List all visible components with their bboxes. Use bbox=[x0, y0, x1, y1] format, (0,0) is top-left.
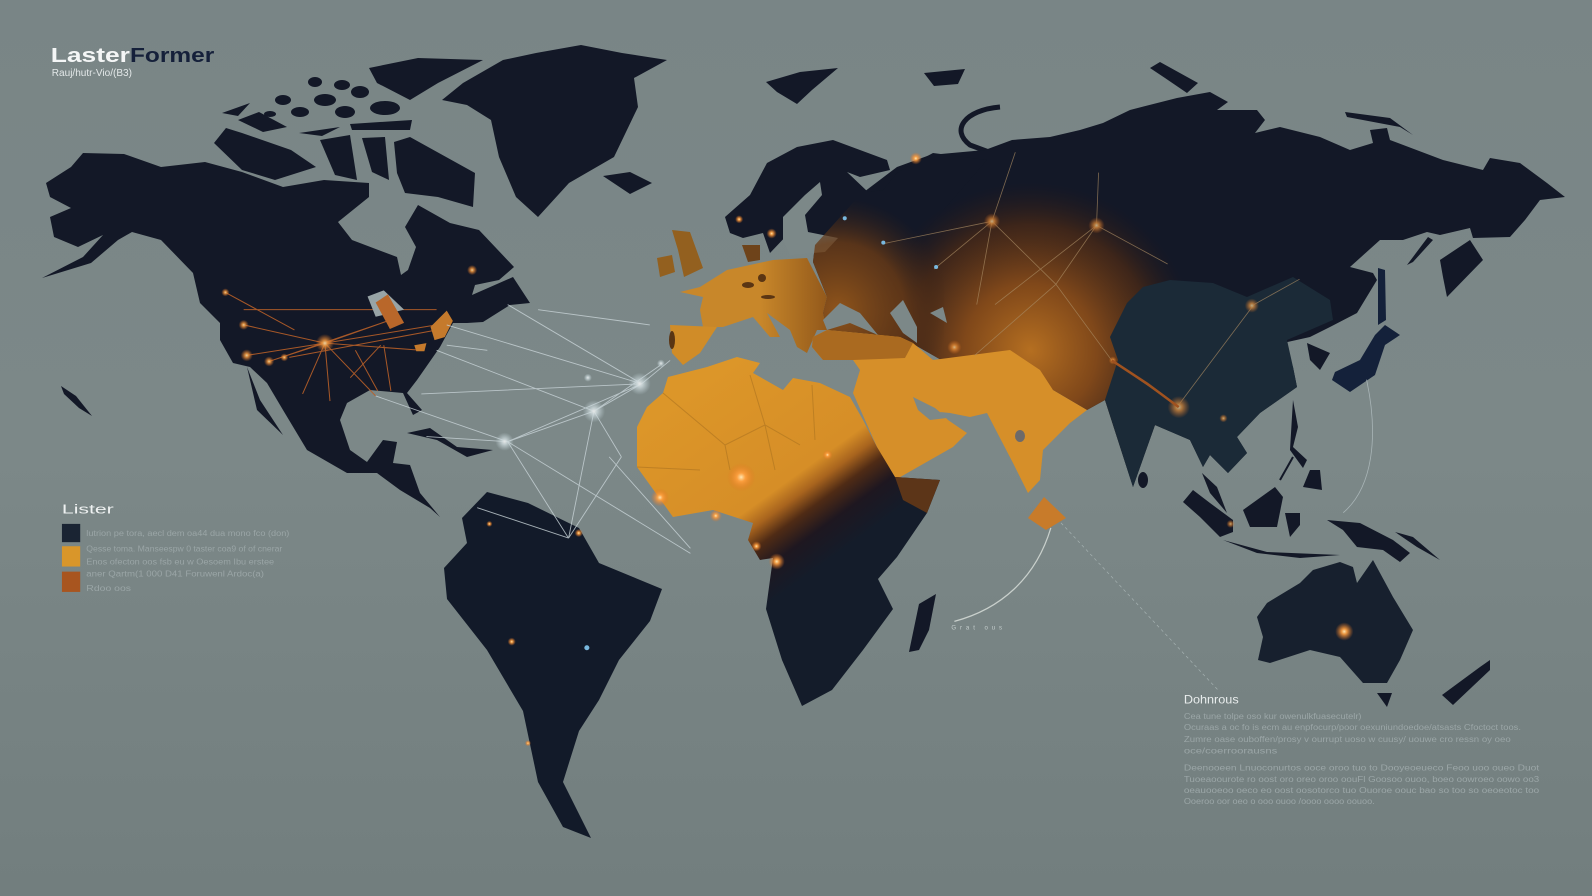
landmass: Arctic archipelagos bbox=[766, 62, 1413, 135]
notes panel bbox=[1184, 693, 1540, 806]
landmass: Tasmania bbox=[1377, 693, 1392, 707]
landmass: Iceland bbox=[603, 172, 652, 194]
swatch: rust bbox=[62, 572, 80, 592]
notes heading: Dohnrous bbox=[1184, 693, 1239, 707]
landmass: Indonesia and Philippines bbox=[1138, 400, 1440, 562]
legend descriptions: lutrion pe tora, aecl dem oa44 dua mono fco (don) bbox=[86, 529, 290, 538]
landmass: Australia bbox=[1257, 560, 1413, 683]
landmass: Eurasia bbox=[813, 92, 1565, 487]
hot spot: Australia bbox=[1335, 622, 1353, 641]
landmass: South America bbox=[444, 492, 662, 838]
landmass: North America bbox=[42, 153, 530, 517]
swatch: amber bbox=[62, 546, 80, 567]
landmass: Novaya Zemlya arc bbox=[961, 107, 1005, 158]
seas: Black Sea, Caspian, Aral and Gulf bbox=[823, 300, 947, 420]
glow: central Asia and eastern Europe bbox=[813, 196, 1167, 454]
nodes: North America bbox=[221, 265, 477, 367]
region: British Isles bbox=[657, 230, 703, 277]
region: Turkey darker band bbox=[812, 330, 913, 360]
legend descriptions: aner Qartm(1 000 D41 Foruwenl Ardoc(a) bbox=[86, 570, 264, 579]
nodes: Asia bbox=[947, 213, 1259, 528]
landmass: Baja California bbox=[247, 367, 283, 435]
texture: Europe specks bbox=[669, 274, 1025, 442]
subtitle: Rauj/hutr-Vio/(B3) bbox=[52, 68, 132, 79]
landmass: Sakhalin strip bbox=[1378, 268, 1386, 325]
landmass: Canadian Arctic islands bbox=[61, 58, 483, 416]
notes paragraph two bbox=[1184, 764, 1540, 806]
landmass: Sakhalin-like island bbox=[1440, 240, 1483, 297]
route: Bangladesh corridor bbox=[1112, 360, 1179, 407]
region: Great Lakes and US east coast glow bbox=[368, 290, 453, 351]
notes paragraph two: oeauooeoo oeco eo oost oosotorco tuo Ouoroe oouc bao so too so oeoeotoc too bbox=[1184, 786, 1540, 795]
sea: Gulf of Bothnia and Gulf of Finland bbox=[783, 182, 838, 255]
notes paragraph one: Cea tune tolpe oso kur owenulkfuasecutelr) bbox=[1184, 712, 1362, 721]
region: China and Indian subcontinent lighter tone bbox=[1105, 277, 1333, 487]
notes paragraph one: Ocuraas a oc fo is ecm au enpfocurp/poor oexuniundoedoe/atsasts Cfoctoct toos. bbox=[1184, 723, 1521, 732]
network: Russia and Asia routes bbox=[883, 152, 1300, 528]
region: Horn of Africa brown bbox=[895, 477, 940, 513]
legend descriptions: Qesse toma. Manseespw 0 taster coa9 of of cnerar bbox=[86, 544, 283, 553]
notes paragraph one: Zumre oase ouboffen/prosy v ourrupt uoso w cuusy/ uouwe cro ressn oy oeo bbox=[1184, 735, 1511, 744]
region: Africa bbox=[637, 357, 940, 706]
Africa country borders bbox=[637, 375, 815, 470]
legend heading: Lister bbox=[62, 502, 115, 517]
landmass: Scandinavia and Finland bbox=[725, 140, 987, 260]
landmass: Caribbean islands bbox=[407, 428, 493, 457]
orange regions and remaining land bbox=[637, 230, 1490, 707]
landmass: Korea bbox=[1307, 343, 1330, 370]
network: Atlantic routes bbox=[376, 305, 690, 553]
landmass: Japan bbox=[1332, 325, 1400, 392]
hot spots: scattered Europe and South America bbox=[486, 152, 922, 746]
region: Iberia orange bbox=[670, 325, 717, 365]
legend descriptions bbox=[86, 529, 290, 593]
landmass: Madagascar bbox=[909, 594, 936, 652]
landmass: New Zealand bbox=[1442, 660, 1490, 705]
landmass: Greenland bbox=[442, 45, 667, 217]
route: dashed line toward notes bbox=[1061, 523, 1218, 690]
title: Former bbox=[130, 45, 214, 67]
hot spots: West Africa bbox=[651, 450, 833, 570]
notes paragraph two: Tuoeaoourote ro oost oro oreo oroo oouFl Goosoo ouoo, boeo oowroeo oowo oo3 bbox=[1184, 775, 1540, 784]
nodes: blue dots bbox=[584, 216, 938, 650]
network: North America routes bbox=[221, 265, 477, 401]
legend descriptions: Rdoo oos bbox=[86, 584, 131, 593]
notes paragraph one bbox=[1184, 712, 1521, 755]
notes paragraph one: oce/coerroorausns bbox=[1184, 746, 1277, 755]
region: Denmark blob bbox=[742, 245, 760, 262]
nodes: Atlantic bbox=[495, 359, 665, 451]
region: Europe orange bbox=[680, 258, 827, 353]
legend bbox=[62, 502, 290, 593]
swatch: dark bbox=[62, 524, 80, 542]
notes paragraph two: Ooeroo oor oeo o ooo ouoo /oooo oooo oouoo. bbox=[1184, 797, 1375, 806]
region: Indian Ocean diamond bbox=[1028, 497, 1066, 530]
route: Southeast Asia curve bbox=[1343, 380, 1373, 513]
notes paragraph two: Deenooeen Lnuoconurtos ooce oroo tuo to Dooyeoeueco Feoo uoo oueo Duot bbox=[1184, 764, 1540, 773]
title bbox=[51, 45, 214, 79]
legend descriptions: Enos ofecton oos fsb eu w Oesoem Ibu erstee bbox=[86, 558, 275, 567]
landmass: Sea of Okhotsk sliver bbox=[1407, 237, 1433, 265]
route: Indian Ocean curve to Madagascar bbox=[954, 528, 1051, 621]
title: Laster bbox=[51, 45, 130, 67]
region: Turkey, Middle East, Arabia and India bbox=[812, 330, 1087, 493]
label: Madagascar callout: Grat ous bbox=[951, 624, 1002, 631]
